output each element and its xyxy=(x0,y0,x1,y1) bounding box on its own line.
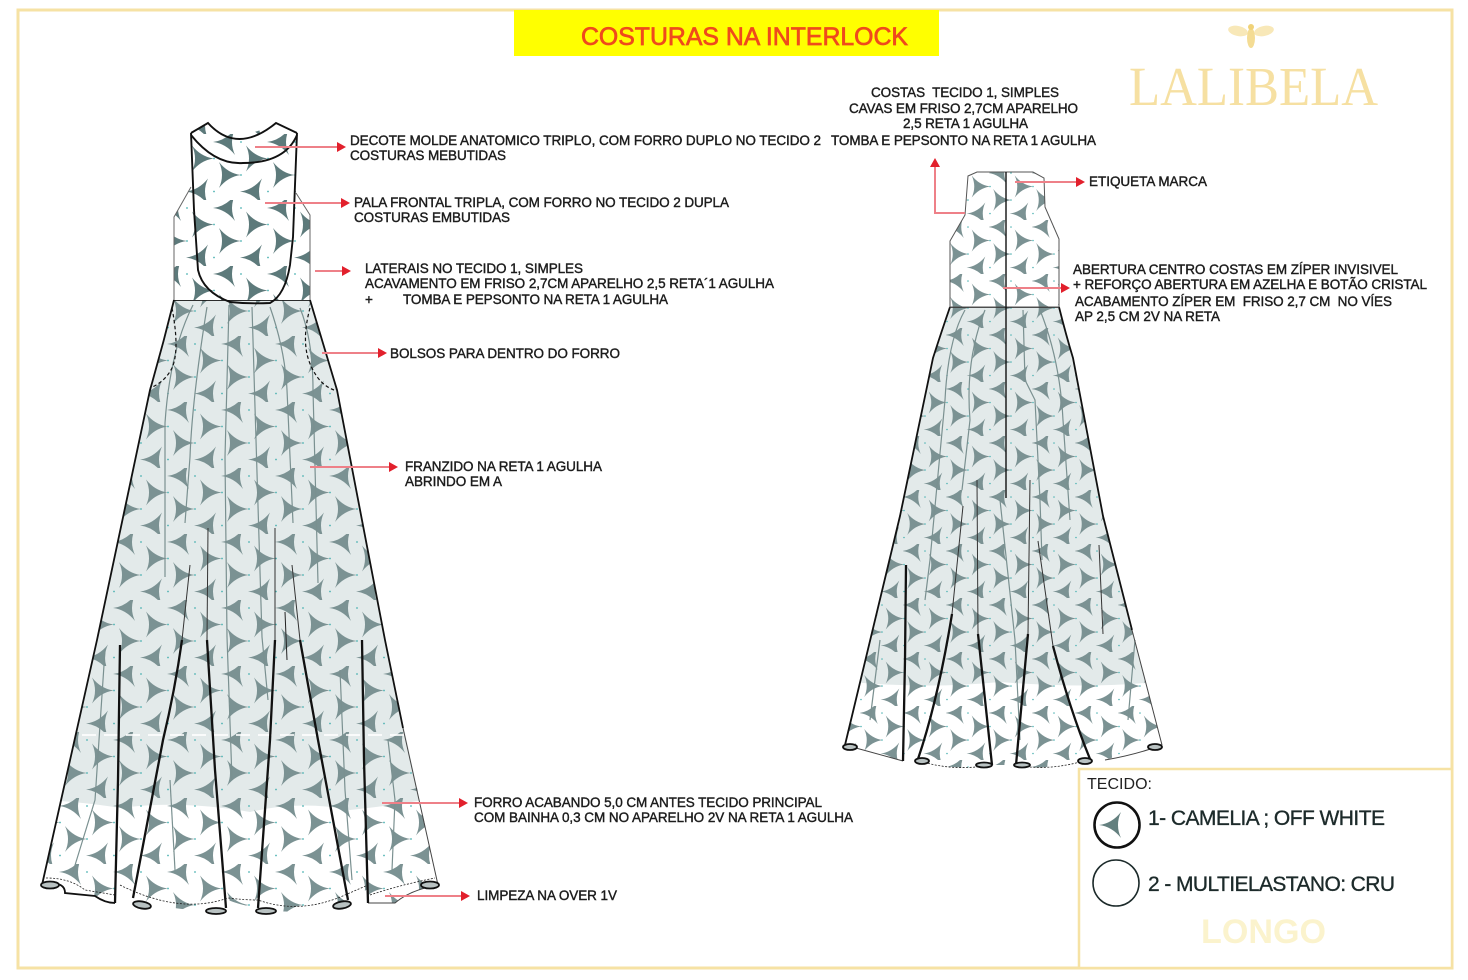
callout: sides: ACAVAMENTO EM FRISO 2,7CM APARELHO 2,5 RETA´1 AGULHA xyxy=(365,276,774,291)
fabric 1 label: 1- CAMELIA ; OFF WHITE xyxy=(1148,807,1385,830)
hem stitching xyxy=(46,878,435,906)
icon: fabric 2 swatch xyxy=(1093,860,1139,906)
title banner xyxy=(514,10,939,56)
back bodice xyxy=(950,172,1059,307)
length label: LONGO xyxy=(1201,913,1326,951)
callout: brand label: ETIQUETA MARCA xyxy=(1089,174,1207,189)
callout: overlock finish xyxy=(385,888,617,903)
callout: back opening: ABERTURA CENTRO COSTAS EM ZÍPER INVISIVEL xyxy=(1073,262,1398,277)
icon: bee xyxy=(1227,24,1275,48)
callout: back armhole: TOMBA E PEPSONTO NA RETA 1 AGULHA xyxy=(831,133,1096,148)
fabric 2 label: 2 - MULTIELASTANO: CRU xyxy=(1148,873,1395,896)
pockets xyxy=(150,308,176,388)
callout: front yoke xyxy=(265,195,729,225)
callout: lining: FORRO ACABANDO 5,0 CM ANTES TECIDO PRINCIPAL xyxy=(474,795,822,810)
callout: sides: TOMBA E PEPSONTO NA RETA 1 AGULHA xyxy=(403,292,668,307)
callout: back armhole: 2,5 RETA 1 AGULHA xyxy=(903,116,1028,131)
callout: back opening: ACABAMENTO ZÍPER EM FRISO 2,7 CM NO VÍES xyxy=(1075,294,1392,309)
front dress illustration xyxy=(30,123,450,935)
callout: back opening: AP 2,5 CM 2V NA RETA xyxy=(1075,309,1220,324)
callout: back opening: + REFORÇO ABERTURA EM AZELHA E BOTÃO CRISTAL xyxy=(1073,277,1427,292)
callout: overlock finish: LIMPEZA NA OVER 1V xyxy=(477,888,617,903)
back skirt xyxy=(830,300,1170,780)
callout: brand label xyxy=(1015,174,1207,189)
callout: neckline: COSTURAS MEBUTIDAS xyxy=(350,148,506,163)
callout: back armhole xyxy=(831,85,1096,213)
callout: neckline: DECOTE MOLDE ANATOMICO TRIPLO, COM FORRO DUPLO NO TECIDO 2 xyxy=(350,133,821,148)
callout: back opening xyxy=(1003,262,1427,324)
callout: sides xyxy=(315,261,774,307)
back skirt folds xyxy=(903,565,906,761)
callout: lining xyxy=(382,795,853,825)
title banner: COSTURAS NA INTERLOCK xyxy=(581,23,908,51)
logo: Lalibela xyxy=(1129,24,1378,117)
skirt folds xyxy=(115,645,120,903)
callout: sides: + xyxy=(365,292,373,307)
front bodice xyxy=(174,123,310,303)
callout: front yoke: COSTURAS EMBUTIDAS xyxy=(354,210,510,225)
logo: Lalibela: LALIBELA xyxy=(1129,56,1378,117)
callout: gathering xyxy=(310,459,602,489)
icon: fabric 1 swatch xyxy=(1094,802,1140,848)
callout: sides: LATERAIS NO TECIDO 1, SIMPLES xyxy=(365,261,583,276)
callout: back armhole: CAVAS EM FRISO 2,7CM APARELHO xyxy=(849,101,1078,116)
callout: lining: COM BAINHA 0,3 CM NO APARELHO 2V NA RETA 1 AGULHA xyxy=(474,810,853,825)
legend heading: TECIDO: xyxy=(1087,776,1152,793)
callout: back armhole: COSTAS TECIDO 1, SIMPLES xyxy=(871,85,1059,100)
callout: pockets: BOLSOS PARA DENTRO DO FORRO xyxy=(390,346,620,361)
callout: neckline xyxy=(255,133,821,163)
skirt outline xyxy=(174,299,310,301)
centre back zip xyxy=(1005,172,1007,498)
front skirt xyxy=(30,295,450,935)
panel: fabric legend xyxy=(1079,769,1452,968)
callout: gathering: ABRINDO EM A xyxy=(405,474,502,489)
callout: front yoke: PALA FRONTAL TRIPLA, COM FORRO NO TECIDO 2 DUPLA xyxy=(354,195,729,210)
hem lobes xyxy=(41,882,59,888)
back dress illustration xyxy=(830,172,1170,780)
callout: gathering: FRANZIDO NA RETA 1 AGULHA xyxy=(405,459,602,474)
